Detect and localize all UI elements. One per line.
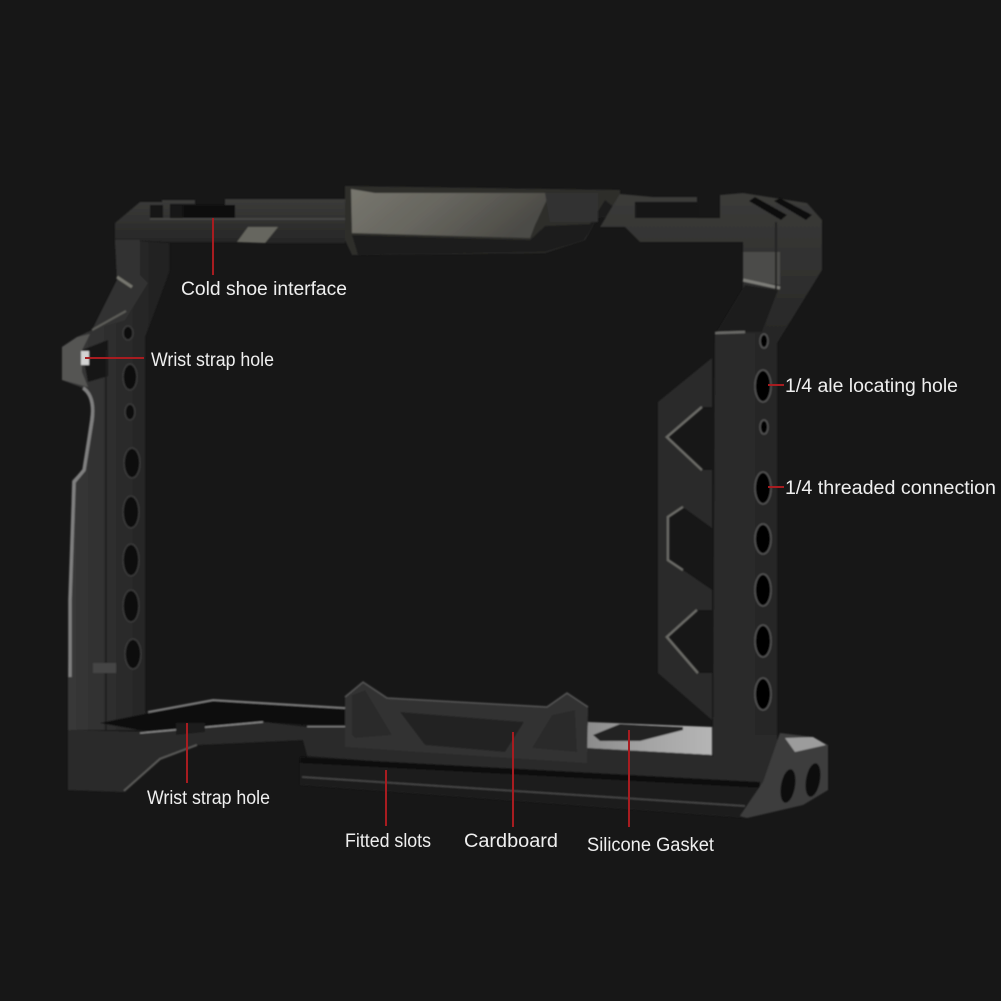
label: cardboard: Cardboard bbox=[464, 831, 558, 852]
bottom left foot bbox=[68, 700, 345, 792]
top bar: left section with cold shoe bbox=[115, 199, 345, 243]
right handle wing with cut-outs bbox=[658, 358, 712, 720]
right column screw holes bbox=[755, 334, 771, 710]
label: 1/4 locating hole: 1/4 ale locating hole bbox=[785, 376, 958, 397]
top center plate bbox=[345, 186, 620, 255]
right column bbox=[713, 332, 780, 782]
label: wrist strap hole (lower): Wrist strap hole bbox=[147, 788, 270, 809]
cardboard clamp bbox=[345, 682, 588, 763]
bottom rail bbox=[300, 727, 763, 818]
camera cage bbox=[62, 186, 828, 818]
label: fitted slots: Fitted slots bbox=[345, 831, 431, 852]
bottom plate with silicone gasket bbox=[585, 722, 712, 755]
bottom right corner block bbox=[740, 733, 828, 818]
label: silicone gasket: Silicone Gasket bbox=[587, 835, 715, 856]
label: cold shoe interface: Cold shoe interface bbox=[181, 279, 347, 300]
label: wrist strap hole (upper): Wrist strap hole bbox=[151, 350, 274, 371]
top bar: right section bbox=[600, 193, 822, 343]
red callout lines bbox=[85, 218, 784, 827]
cut-out highlights bbox=[667, 407, 702, 673]
left column and grip bbox=[62, 240, 170, 730]
label: 1/4 threaded connection: 1/4 threaded connection bbox=[785, 478, 996, 499]
left column screw holes bbox=[123, 326, 141, 669]
